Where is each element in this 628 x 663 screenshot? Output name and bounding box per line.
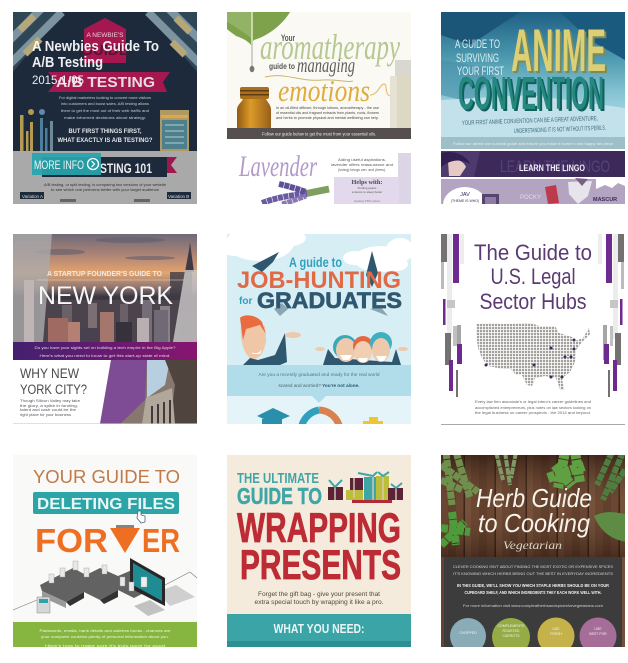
info strip: Follow our anime con survival guide and ensure you make it home in one happy fan piece xyxy=(453,142,613,146)
body paragraph: the legal business on career prospects - the 2014 and beyond. xyxy=(475,410,591,415)
more info button: MORE INFO xyxy=(34,158,84,172)
overlay title: A Newbies Guide To A/B Testing: A Newbies Guide To xyxy=(32,38,159,55)
blue intro band: scared and worried? You're not alone. xyxy=(278,383,360,388)
icon: lavender sprig xyxy=(262,184,329,204)
heading: The Guide to U.S. Legal Sector Hubs xyxy=(474,240,592,314)
lavender section: Finding peace xyxy=(358,186,377,190)
heading: Herb guide to cooking: to Cooking xyxy=(478,508,590,538)
heading: New York: NEW YORK xyxy=(38,282,173,310)
body text: right place for your business xyxy=(20,413,71,417)
heading: Your aromatherapy guide to managing emotions xyxy=(260,34,400,102)
intro paragraph: In an oil-filled diffuser, through lotions, aromatherapy - the use xyxy=(276,106,379,110)
panel: New York startup guide xyxy=(13,234,197,424)
heading: for graduates: GRADUATES xyxy=(257,288,402,313)
crimson ribbon heading: A/B TESTING xyxy=(56,74,155,91)
icon: green leaf with droplet xyxy=(227,12,290,72)
purple intro band: Do you have your sights set on building a tech empire in the Big Apple? xyxy=(34,345,176,350)
intro paragraph: them to get the most out of their web traffic and xyxy=(61,109,149,113)
grey lower section: to see which one performs better with your target audience xyxy=(51,188,159,192)
icon: graduation caps xyxy=(252,251,388,316)
split test document motif xyxy=(160,110,189,151)
lower pale section with icons xyxy=(227,396,411,425)
grey lower section: STING 101 xyxy=(100,161,152,176)
blue intro band: Are you a recently graduated and ready for the real world xyxy=(258,372,380,377)
lavender section: lavender offers reassurance and xyxy=(331,162,393,167)
panel: anime convention guide xyxy=(441,12,625,223)
lavender section xyxy=(238,153,411,204)
heading: The Guide to U.S. Legal Sector Hubs: U.S. Legal xyxy=(490,264,576,289)
herb category circles: FRESH xyxy=(550,632,562,636)
grey lower section xyxy=(13,151,197,204)
crimson hexagon badge: GUIDE xyxy=(81,42,129,59)
herb category circles: USE xyxy=(594,627,602,631)
green intro band: your computer contains plenty of personal information about you. xyxy=(41,634,169,639)
heading: The ultimate guide to: THE ULTIMATE xyxy=(237,470,319,487)
left decorative bars xyxy=(441,234,464,397)
heading: Herb guide to cooking xyxy=(476,483,592,538)
tagline: extra special touch by wrapping it like a pro. xyxy=(254,600,384,606)
lilac glossary band xyxy=(441,178,625,204)
faded bottle xyxy=(390,60,411,128)
heading: CONVENTION xyxy=(458,76,604,112)
icon: hand cursor xyxy=(137,511,145,523)
icon: amber oil bottle xyxy=(237,87,271,128)
chalkboard panel: IT'S KNOWING WHICH HERBS BRING OUT THE BEST IN EVERYDAY INGREDIENTS xyxy=(453,571,613,576)
heading: Presents: PRESENTS xyxy=(240,541,401,588)
chalkboard panel xyxy=(444,557,622,656)
teal band: what you need xyxy=(227,614,411,647)
herb category circles: ROASTED xyxy=(503,629,520,633)
lilac glossary band: POCKY xyxy=(520,195,541,201)
herb bunches xyxy=(441,452,628,545)
lilac glossary band: JAV xyxy=(460,192,470,198)
why New York City heading: WHY NEW xyxy=(20,366,79,381)
heading: Forever with trash can V: ER xyxy=(142,522,180,559)
decorative corner tiles xyxy=(13,12,197,72)
heading: A guide to surviving your first xyxy=(455,39,504,78)
heading: ANIME xyxy=(512,29,607,73)
lavender section: Healing PMS aches xyxy=(354,199,381,203)
purple intro band: Here's what you need to know to get this start-up state of mind. xyxy=(40,353,170,358)
body text: talent and cash could be the xyxy=(20,408,76,412)
heading: Your aromatherapy guide to managing emotions: aromatherapy xyxy=(260,27,400,67)
teal band: what you need: WHAT YOU NEED: xyxy=(274,622,364,636)
overlay date: 2015-1-05 xyxy=(32,73,84,87)
heading: A guide to: A guide to xyxy=(289,255,342,270)
green intro band xyxy=(13,622,197,648)
faded side buildings xyxy=(13,234,197,342)
green intro band: Here's how to make sure it's truly gone for good xyxy=(45,643,165,648)
illustration: graduate man xyxy=(240,315,301,365)
heading: A guide to surviving your first: SURVIVING xyxy=(456,53,499,65)
grey lower section: A/B testing, or split testing, is comparing two versions of your website xyxy=(44,183,166,187)
heading: Wrapping: WRAPPING xyxy=(237,504,401,551)
heading: Your aromatherapy guide to managing emotions: Your xyxy=(281,33,295,43)
teal button: deleting files xyxy=(33,492,179,514)
heading: A startup founder's guide to: A STARTUP FOUNDER'S GUIDE TO xyxy=(47,269,162,278)
dark caption bar xyxy=(227,128,411,139)
intro paragraph xyxy=(276,106,379,120)
herb category circles: CARROTS xyxy=(502,634,520,638)
herb category circles: COMPLEMENTS xyxy=(497,624,525,628)
heading: Herb guide to cooking: Herb Guide xyxy=(476,483,592,513)
dot map of the United States xyxy=(476,323,590,390)
lavender section: Lavender xyxy=(238,150,317,183)
body text xyxy=(20,399,80,417)
icon: stack of presents xyxy=(328,472,403,503)
question heading: WHAT EXACTLY IS A/B TESTING? xyxy=(58,137,152,144)
subtitle: Vegetarian: Vegetarian xyxy=(503,538,562,552)
clouds at sunset xyxy=(35,237,175,260)
heading: Job-hunting: JOB-HUNTING xyxy=(237,267,401,294)
subtitle xyxy=(462,116,606,133)
why New York City heading: YORK CITY? xyxy=(20,382,87,397)
purple intro band xyxy=(13,342,197,360)
question heading: BUT FIRST THINGS FIRST, xyxy=(68,128,142,135)
body paragraph: Every law firm associate's or legal intern's career guidelines and xyxy=(475,399,591,404)
heading: Your aromatherapy guide to managing emotions: emotions xyxy=(278,73,370,108)
city skyline xyxy=(40,242,194,342)
panel: aromatherapy guide xyxy=(227,12,411,204)
teal button: deleting files: DELETING FILES xyxy=(37,496,175,513)
intro paragraph: of essential oils and fragrant extracts from plants, roots, flowers xyxy=(276,111,379,115)
overlay title: A Newbies Guide To A/B Testing: A/B Testing xyxy=(32,54,103,71)
tagline xyxy=(254,592,384,606)
grey lower section: Variation A xyxy=(22,194,43,199)
lavender section: a desire to sleep better xyxy=(352,190,382,194)
intro paragraph: make informed decisions about strategy. xyxy=(64,116,146,120)
body paragraph: accomplished entrepreneurs, plus notes on law sectors looking on xyxy=(475,405,591,410)
panel: deleting files guide xyxy=(13,455,197,648)
grey lower section: Variation B xyxy=(168,194,189,199)
right decorative bars xyxy=(598,234,624,397)
why New York City heading xyxy=(20,368,87,394)
body paragraph xyxy=(475,399,591,415)
lilac glossary band: (THEME IS WHO) xyxy=(451,199,479,203)
chalkboard panel: For more information visit www.compleatherbsandspicesforvegetarians.com xyxy=(463,604,603,608)
intro paragraph: into customers and boost sales, A/B testing allows xyxy=(61,102,149,106)
info strip xyxy=(441,137,625,149)
lavender section: Aiding useful aspirations, xyxy=(338,157,386,162)
purple band: learn the lingo: LEARN THE LINGO xyxy=(519,163,585,173)
city street photo xyxy=(100,360,197,424)
clouds xyxy=(227,234,411,272)
body text: Though Silicon Valley may take xyxy=(20,399,80,403)
more info button xyxy=(32,153,101,175)
blue intro band xyxy=(227,365,411,396)
lavender section: Helps with: xyxy=(352,180,382,186)
heading: Your aromatherapy guide to managing emotions: managing xyxy=(297,55,355,77)
purple band: learn the lingo xyxy=(441,151,625,177)
herb category circles xyxy=(450,618,616,656)
crimson hexagon badge xyxy=(81,18,129,63)
lilac glossary band: MASCUR xyxy=(593,197,617,203)
intro paragraph: and herbs to promote physical and mental wellbeing can help. xyxy=(276,116,379,120)
heading: The ultimate guide to xyxy=(237,470,322,509)
panel: U.S. legal sector hubs xyxy=(441,234,625,425)
intro paragraph xyxy=(59,96,151,120)
panel: wrapping presents guide xyxy=(227,455,411,647)
body text: the glory, a spike in funding, xyxy=(20,404,78,408)
heading: The Guide to U.S. Legal Sector Hubs: Sector Hubs xyxy=(480,289,586,314)
heading: A guide to surviving your first: YOUR FIRST xyxy=(457,66,504,78)
herb category circles: CHOPPED xyxy=(459,631,477,635)
illustration: office desks and monitor xyxy=(13,558,197,616)
panel: A/B testing guide xyxy=(6,8,204,204)
heading: for graduates: for xyxy=(239,296,252,307)
question heading xyxy=(58,128,152,142)
herb category circles: USE xyxy=(552,627,560,631)
heading: The Guide to U.S. Legal Sector Hubs: The Guide to xyxy=(474,240,592,265)
crimson hexagon badge: A NEWBIE'S xyxy=(86,32,124,39)
chalkboard panel: CLEVER COOKING ISN'T ABOUT FINDING THE MOST EXOTIC OR EXPENSIVE SPICES xyxy=(453,564,613,569)
heading: The ultimate guide to: GUIDE TO xyxy=(237,483,322,509)
heading: Forever with trash can V xyxy=(35,522,180,559)
panel: vegetarian herb guide xyxy=(441,452,628,656)
panel: job-hunting guide xyxy=(220,225,414,425)
illustration: three graduates xyxy=(315,332,408,365)
dark caption bar: Follow our guide below to get the most from your essential oils. xyxy=(262,132,376,136)
overlay title: A Newbies Guide To A/B Testing xyxy=(32,38,159,71)
bar and pin chart motif xyxy=(20,109,53,151)
intro paragraph: For digital marketers looking to convert more visitors xyxy=(59,96,151,100)
tagline: Forget the gift bag - give your present that xyxy=(258,592,380,598)
lavender section: (loving) brings zen. and (bees). xyxy=(338,167,386,172)
herb category circles: BEST FOR xyxy=(589,632,607,636)
heading: Your aromatherapy guide to managing emotions: guide to xyxy=(269,61,295,71)
green intro band: Passwords, emails, bank details and address books - chances are xyxy=(40,628,170,633)
heading: A guide to surviving your first: A GUIDE TO xyxy=(455,39,500,51)
heading: Forever with trash can V: FOR xyxy=(35,522,108,559)
heading: Your guide to: YOUR GUIDE TO xyxy=(33,466,180,487)
crimson ribbon heading xyxy=(48,72,170,92)
